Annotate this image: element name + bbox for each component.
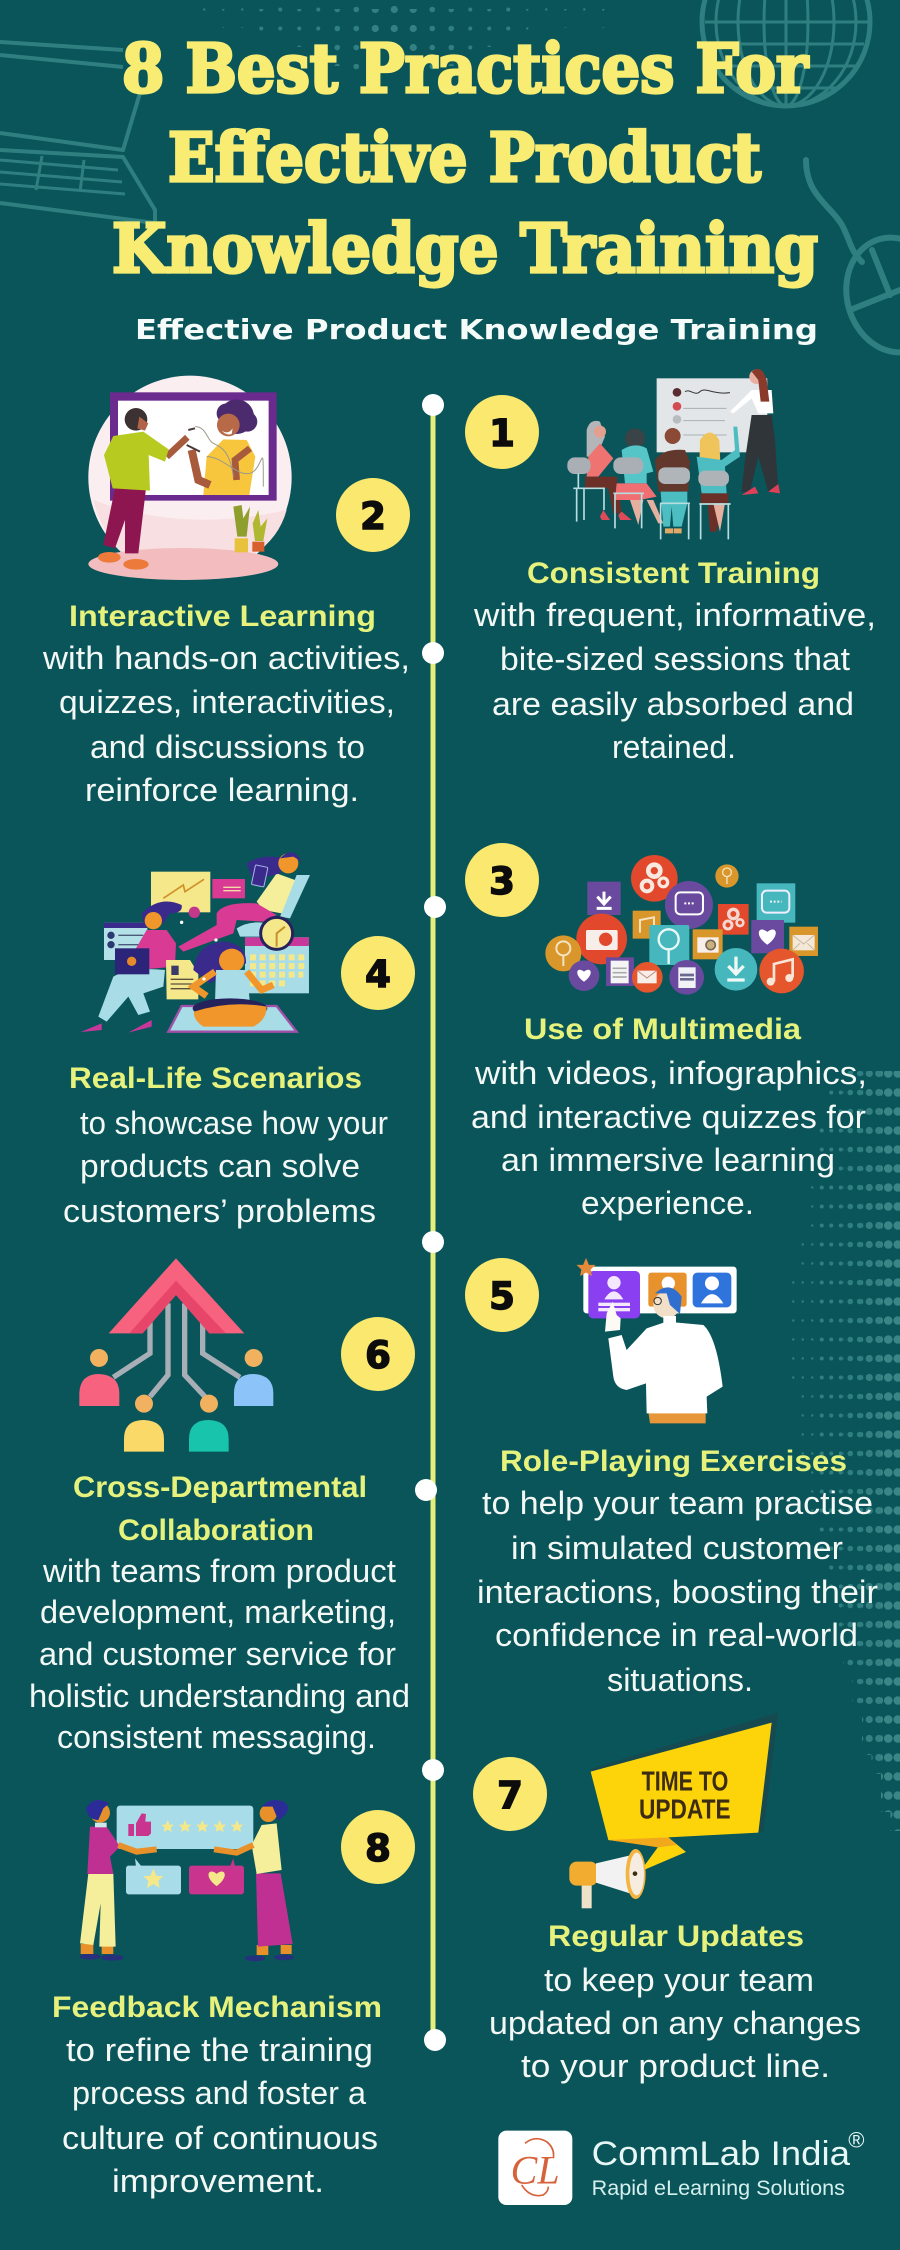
text: feedback mechanism: process and foster a [72,2075,366,2111]
text: cross-departmental collaboration: development, marketing, [40,1594,396,1630]
text: consistent training: are easily absorbed and [492,686,854,722]
text: role-playing exercises: situations. [607,1662,753,1698]
text: use of multimedia: Use of Multimedia [524,1013,801,1046]
background decoration: laptop outline [0,42,155,223]
text: cross-departmental collaboration: with teams from product [42,1553,396,1589]
text: cross-departmental collaboration: Collaboration [118,1514,314,1547]
text: consistent training: bite-sized sessions that [500,641,850,677]
number badge 1: 1 [489,412,515,455]
text: interactive learning: and discussions to [90,729,365,765]
number badge 3: 3 [489,860,515,903]
text: consistent training [473,557,876,765]
text: interactive learning: quizzes, interactivities, [59,684,395,720]
text: regular updates: to your product line. [521,2048,830,2084]
text: use of multimedia: an immersive learning [501,1142,835,1178]
text: consistent training: Consistent Training [527,557,820,590]
illustration: people at a screen [88,376,292,580]
background decoration: computer mouse and cable [806,160,900,363]
title [112,29,818,288]
panel: practice 6 cross-departmental collaboration [29,1258,415,1755]
background decoration: right halftone dots [786,1071,900,1831]
text: cross-departmental collaboration: and customer service for [39,1636,396,1672]
wordmark: CommLab India [592,2135,851,2173]
number badge 2 [336,478,410,552]
text: use of multimedia: with videos, infographics, [474,1055,867,1091]
illustration: megaphone with speech burst: UPDATE [639,1793,731,1824]
text: real-life scenarios: products can solve [80,1148,360,1184]
timeline [415,394,446,2051]
text: use of multimedia [471,1013,867,1221]
panel: practice 8 feedback mechanism [52,1800,415,2199]
number badge 3 [465,843,539,917]
number badge 5: 5 [489,1275,515,1318]
text: role-playing exercises: Role-Playing Exercises [500,1445,847,1478]
illustration: person choosing a profile [576,1258,737,1423]
panel: practice 4 real-life scenarios [63,852,415,1229]
panel: practice 1 consistent training [465,369,876,765]
text: use of multimedia: experience. [581,1185,754,1221]
text: feedback mechanism: to refine the training [66,2032,373,2068]
text: regular updates: Regular Updates [548,1920,804,1953]
text: cross-departmental collaboration: holistic understanding and [29,1678,410,1714]
text: use of multimedia: and interactive quizzes for [471,1099,866,1135]
number badge 7: 7 [497,1774,523,1817]
text: interactive learning: reinforce learning. [85,772,359,808]
illustration: multimedia icon cluster [545,855,818,995]
text: consistent training: retained. [612,729,736,765]
wordmark: Rapid eLearning Solutions [592,2176,845,2200]
panel: practice 5 role-playing exercises [465,1258,878,1698]
panel: practice 2 interactive learning [42,376,410,808]
illustration: people working and relaxing [81,852,310,1033]
number badge 8: 8 [365,1827,391,1870]
number badge 7 [473,1757,547,1831]
text: interactive learning [42,600,410,808]
text: regular updates: to keep your team [544,1962,814,1998]
number badge 8 [341,1810,415,1884]
title: 8 Best Practices For [122,29,809,108]
text: cross-departmental collaboration: Cross-Departmental [73,1471,367,1504]
text: role-playing exercises: to help your team practise [482,1485,873,1521]
text: interactive learning: with hands-on activities, [42,640,410,676]
background decoration: top halftone dots [200,0,608,76]
text: real-life scenarios [63,1062,388,1229]
icon: CL mark: CL [511,2147,560,2192]
number badge 4: 4 [365,953,391,996]
number badge 6 [341,1317,415,1391]
text: consistent training: with frequent, informative, [473,597,876,633]
wordmark: ® [848,2127,864,2152]
number badge 1 [465,395,539,469]
number badge 4 [341,936,415,1010]
title: Knowledge Training [112,209,818,288]
text: regular updates [489,1920,861,2084]
text: real-life scenarios: customers’ problems [63,1193,376,1229]
text: interactive learning: Interactive Learning [69,600,376,633]
logo: CommLab India [498,2127,864,2205]
number badge 5 [465,1258,539,1332]
text: role-playing exercises: interactions, boosting their [477,1574,878,1610]
text: feedback mechanism [52,1991,382,2199]
text: cross-departmental collaboration [29,1471,410,1755]
illustration: connected departments [79,1258,273,1452]
text: real-life scenarios: to showcase how your [80,1105,388,1141]
text: role-playing exercises [477,1445,878,1698]
subtitle: Effective Product Knowledge Training [135,313,818,346]
illustration: megaphone with speech burst [569,1713,778,1908]
wordmark [592,2127,864,2200]
text: cross-departmental collaboration: consistent messaging. [57,1719,376,1755]
panel: practice 3 use of multimedia [465,843,867,1221]
text: role-playing exercises: in simulated customer [511,1530,843,1566]
number badge 6: 6 [365,1334,391,1377]
title: Effective Product [168,118,761,197]
icon: CL mark [498,2131,572,2205]
text: feedback mechanism: improvement. [112,2163,324,2199]
background decoration: globe outline [702,0,870,106]
text: role-playing exercises: confidence in real-world [495,1617,858,1653]
panel: practice 7 regular updates [473,1713,861,2084]
text: real-life scenarios: Real-Life Scenarios [69,1062,362,1095]
text: feedback mechanism: culture of continuous [62,2120,378,2156]
illustration: two people holding a rating board [79,1800,294,1961]
number badge 2: 2 [360,495,386,538]
text: regular updates: updated on any changes [489,2005,861,2041]
text: feedback mechanism: Feedback Mechanism [52,1991,382,2024]
illustration: classroom training [567,369,780,539]
illustration: megaphone with speech burst: TIME TO [642,1766,728,1797]
